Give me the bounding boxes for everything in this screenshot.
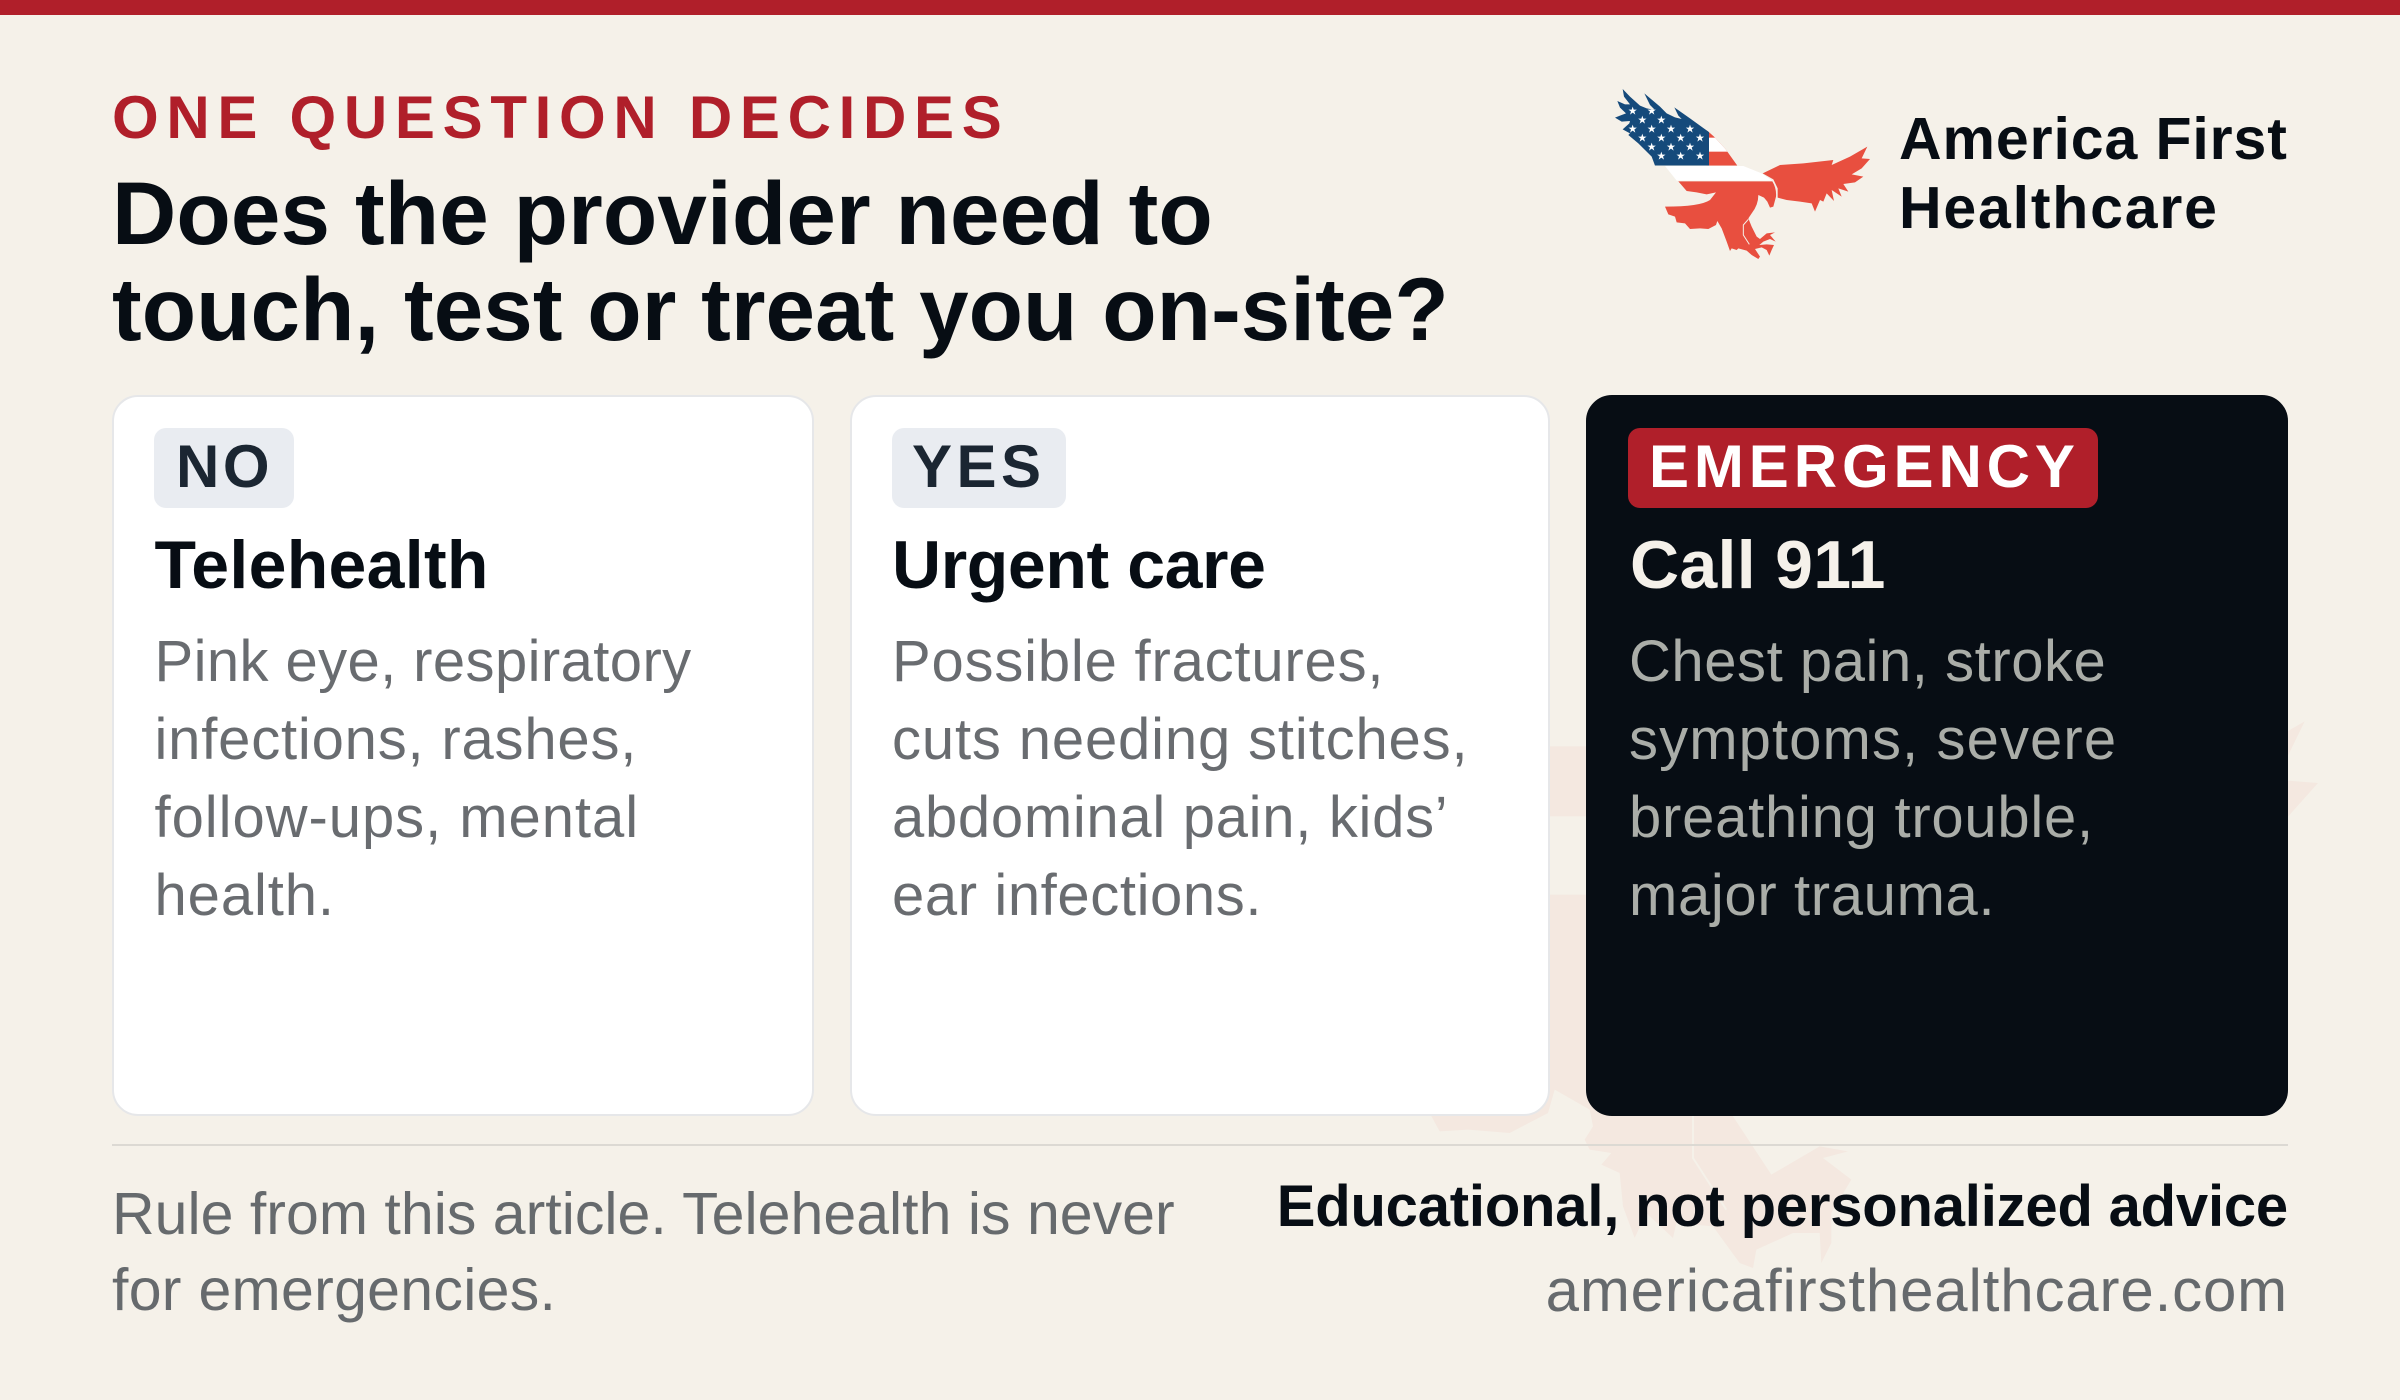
footer disclaimer: Educational, not personalized advice	[1277, 1174, 2288, 1239]
brand name: America First	[1899, 106, 2288, 172]
watermark eagle	[1432, 722, 2318, 1268]
text: urgent care conditions	[892, 629, 1468, 928]
heading: telehealth: Telehealth	[154, 527, 489, 603]
text: urgent care conditions: cuts needing stitches,	[892, 707, 1468, 772]
badge: yes	[892, 428, 1066, 508]
text: telehealth conditions: health.	[154, 863, 335, 928]
footer note	[112, 1181, 1175, 1323]
text: urgent care conditions: Possible fractures,	[892, 629, 1384, 694]
text: emergency conditions: symptoms, severe	[1629, 707, 2117, 772]
top accent bar	[0, 0, 2400, 15]
title	[112, 163, 1449, 359]
text: emergency conditions	[1629, 629, 2117, 928]
text: emergency conditions: major trauma.	[1629, 863, 1995, 928]
badge: emergency: EMERGENCY	[1649, 433, 2080, 500]
text: telehealth conditions: infections, rashes,	[154, 707, 637, 772]
title: Does the provider need to	[112, 163, 1213, 263]
title: touch, test or treat you on-site?	[112, 259, 1449, 359]
brand name	[1899, 106, 2288, 241]
text: emergency conditions: Chest pain, stroke	[1629, 629, 2106, 694]
text: emergency conditions: breathing trouble,	[1629, 785, 2094, 850]
footer note: for emergencies.	[112, 1257, 556, 1323]
panel: emergency	[1586, 395, 2288, 1116]
badge: no: NO	[176, 433, 273, 500]
eyebrow: ONE QUESTION DECIDES	[112, 84, 1009, 151]
badge: no	[154, 428, 294, 508]
panel: telehealth	[112, 395, 814, 1116]
logo	[1615, 89, 2288, 259]
text: telehealth conditions: follow-ups, mental	[154, 785, 639, 850]
divider	[112, 1144, 2288, 1146]
heading: urgent care: Urgent care	[892, 527, 1266, 603]
text: urgent care conditions: abdominal pain, kids’	[892, 785, 1448, 850]
text: telehealth conditions: Pink eye, respiratory	[154, 629, 692, 694]
icon: flag eagle	[1615, 89, 1870, 259]
heading: call 911: Call 911	[1630, 527, 1886, 603]
footer url: americafirsthealthcare.com	[1546, 1257, 2288, 1324]
brand name: Healthcare	[1899, 175, 2219, 241]
text: telehealth conditions	[154, 629, 692, 928]
footer note: Rule from this article. Telehealth is never	[112, 1181, 1175, 1247]
badge: yes: YES	[912, 433, 1046, 500]
text: urgent care conditions: ear infections.	[892, 863, 1262, 928]
panel: urgent care	[850, 395, 1550, 1116]
